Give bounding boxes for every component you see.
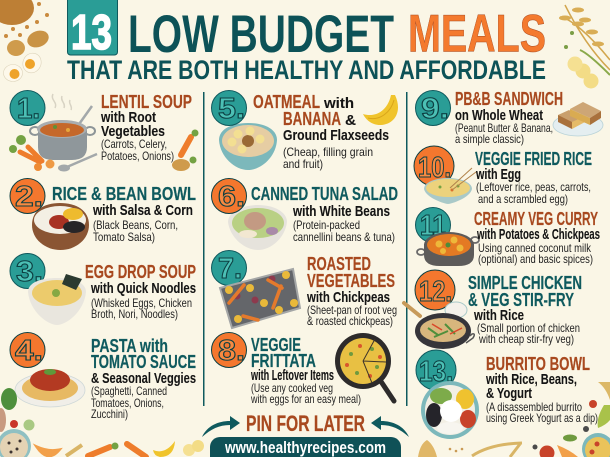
- text: oatmeal: (Cheap, filling grain: [283, 145, 373, 159]
- text: veggie frittata: [250, 335, 361, 406]
- icon: curry pot: [417, 232, 479, 266]
- text: canned tuna salad: with White Beans: [292, 203, 390, 220]
- text: creamy veg curry: [474, 209, 600, 266]
- meal 4: pasta with tomato sauce: [10, 332, 196, 421]
- text: oatmeal: with: [323, 95, 354, 112]
- number 2: 2.: [15, 181, 43, 213]
- text: veggie frittata: FRITTATA: [251, 351, 316, 371]
- title: [67, 0, 546, 85]
- text: lentil soup: LENTIL SOUP: [101, 92, 192, 112]
- number 8: [212, 332, 246, 368]
- number 9: [416, 90, 450, 126]
- text: roasted vegetables: & roasted chickpeas): [307, 314, 393, 328]
- text: egg drop soup: [85, 262, 196, 321]
- text: pb and b sandwich: on Whole Wheat: [455, 107, 543, 124]
- icon: wok: [404, 302, 474, 349]
- icon: banana: [363, 95, 398, 125]
- icon: spaghetti plate: [15, 369, 85, 407]
- text: lentil soup: Potatoes, Onions): [101, 149, 174, 163]
- icon: rice bowl: [32, 203, 89, 250]
- text: lentil soup: (Carrots, Celery,: [101, 137, 167, 151]
- icon: fried rice bowl: [424, 168, 476, 204]
- pin for later: PIN FOR LATER: [246, 411, 365, 436]
- text: rice and bean bowl: Tomato Salsa): [93, 230, 155, 244]
- number 7: 7.: [218, 253, 242, 285]
- meal 8: veggie frittata: [212, 332, 394, 406]
- text: chicken stir fry: [468, 273, 582, 346]
- text: pasta with tomato sauce: & Seasonal Veggies: [91, 370, 196, 387]
- meal 9: pb and b sandwich: [416, 89, 603, 146]
- icon: sandwich: [553, 102, 603, 136]
- decoration: bottom right food: [418, 382, 610, 457]
- text: rice and bean bowl: RICE & BEAN BOWL: [52, 184, 196, 204]
- text: rice and bean bowl: with Salsa & Corn: [92, 202, 193, 219]
- meal 10: veggie fried rice: [414, 146, 592, 206]
- heading: low budget: LOW BUDGET: [128, 5, 394, 64]
- text: lentil soup: with Root: [100, 109, 156, 126]
- text: canned tuna salad: [251, 184, 398, 244]
- number 12: [415, 270, 455, 310]
- meal 1: lentil soup: [9, 90, 198, 172]
- text: chicken stir fry: & VEG STIR-FRY: [468, 290, 574, 310]
- text: egg drop soup: (Whisked Eggs, Chicken: [91, 296, 192, 310]
- meal 13: burrito bowl: [416, 350, 598, 439]
- text: pb and b sandwich: a simple classic): [455, 132, 524, 146]
- text: burrito bowl: with Rice, Beans,: [485, 371, 577, 388]
- meal 5: oatmeal with banana: [212, 90, 398, 171]
- number 2: [10, 178, 45, 214]
- icon: frittata skillet: [335, 333, 394, 401]
- number 4: 4.: [15, 335, 43, 367]
- text: pasta with tomato sauce: PASTA with: [91, 336, 168, 356]
- decoration: wheat and banana slices top right: [559, 5, 610, 88]
- text: rice and bean bowl: [52, 184, 196, 244]
- icon: sheet pan: [220, 269, 300, 328]
- text: pb and b sandwich: (Peanut Butter & Banana,: [455, 121, 553, 135]
- text: roasted vegetables: VEGETABLES: [307, 271, 395, 291]
- text: oatmeal: BANANA: [283, 109, 341, 129]
- icon: soup pot: [9, 94, 198, 172]
- text: veggie fried rice: with Egg: [475, 166, 521, 183]
- text: rice and bean bowl: (Black Beans, Corn,: [93, 218, 178, 232]
- text: pasta with tomato sauce: Tomatoes, Onions,: [91, 396, 164, 410]
- number 5: [212, 90, 246, 126]
- icon: oatmeal bowl: [219, 123, 277, 170]
- text: veggie frittata: with Leftover Items: [250, 367, 334, 384]
- text: burrito bowl: (A disassembled burrito: [486, 400, 582, 414]
- text: veggie frittata: with eggs for an easy meal): [250, 392, 361, 406]
- text: veggie frittata: (Use any cooked veg: [251, 381, 333, 395]
- text: pb and b sandwich: PB&B SANDWICH: [455, 89, 563, 109]
- number 4: [10, 332, 45, 368]
- icon: burrito bowl: [421, 381, 479, 439]
- website pill: www.healthyrecipes.com: [224, 438, 386, 457]
- text: pasta with tomato sauce: (Spaghetti, Canned: [91, 384, 167, 398]
- text: pasta with tomato sauce: Zucchini): [91, 407, 128, 421]
- text: oatmeal: Ground Flaxseeds: [283, 127, 389, 144]
- text: chicken stir fry: with cheap stir-fry veg): [478, 332, 574, 346]
- decoration: lentils, potatoes and eggs top left: [0, 0, 51, 82]
- number 13: [416, 350, 456, 390]
- text: roasted vegetables: (Sheet-pan of root veg: [307, 303, 397, 317]
- number 1: [10, 90, 45, 126]
- text: burrito bowl: [485, 354, 598, 425]
- text: veggie frittata: VEGGIE: [251, 335, 301, 355]
- text: oatmeal: &: [345, 112, 356, 129]
- meal 7: roasted vegetables: [212, 250, 397, 328]
- meal 11: creamy veg curry: [416, 208, 600, 266]
- meal 6: canned tuna salad: [212, 178, 398, 250]
- number 10: 10.: [418, 152, 451, 184]
- number 6: [212, 178, 246, 214]
- text: canned tuna salad: cannellini beans & tuna): [293, 230, 395, 244]
- number 12: 12.: [419, 276, 452, 308]
- text: roasted vegetables: ROASTED: [307, 254, 371, 274]
- meal 12: chicken and veg stir fry: [404, 270, 582, 349]
- text: burrito bowl: & Yogurt: [486, 385, 532, 402]
- text: egg drop soup: Broth, Nori, Noodles): [91, 307, 178, 321]
- meal 2: rice and bean bowl: [10, 178, 196, 250]
- icon: tuna salad bowl: [228, 205, 287, 250]
- text: chicken stir fry: (Small portion of chicken: [477, 321, 580, 335]
- number badge 13: 13: [71, 6, 112, 60]
- text: lentil soup: [100, 92, 192, 163]
- number 10: [414, 146, 454, 186]
- text: egg drop soup: EGG DROP SOUP: [85, 262, 196, 282]
- arrow left: [202, 416, 240, 437]
- text: chicken stir fry: with Rice: [473, 307, 524, 324]
- text: canned tuna salad: (Protein-packed: [293, 218, 360, 232]
- text: lentil soup: Vegetables: [101, 123, 165, 140]
- text: pasta with tomato sauce: [91, 336, 196, 421]
- number 3: [10, 254, 45, 288]
- text: oatmeal: and fruit): [283, 157, 323, 171]
- number 6: 6.: [218, 181, 245, 213]
- text: roasted vegetables: [306, 254, 397, 328]
- number 9: 9.: [421, 93, 449, 125]
- number 5: 5.: [218, 93, 245, 125]
- text: oatmeal: OATMEAL: [253, 92, 320, 112]
- text: egg drop soup: with Quick Noodles: [90, 280, 196, 297]
- icon: soup bowl: [28, 274, 86, 325]
- number 8: 8.: [218, 335, 245, 367]
- text: veggie fried rice: and a scrambled egg): [478, 192, 568, 206]
- number 3: 3.: [16, 256, 43, 288]
- text: roasted vegetables: with Chickpeas: [306, 289, 390, 306]
- heading: meals: MEALS: [408, 4, 546, 64]
- meal 3: egg drop soup: [10, 254, 196, 325]
- number 11: 11: [420, 210, 446, 242]
- text: canned tuna salad: CANNED TUNA SALAD: [251, 184, 398, 204]
- number 1: 1.: [17, 93, 40, 125]
- number 7: [212, 250, 246, 286]
- decoration: bottom left food: [0, 388, 204, 457]
- arrow right: [371, 416, 409, 437]
- text: pb and b sandwich: [455, 89, 563, 146]
- text: pasta with tomato sauce: TOMATO SAUCE: [91, 352, 196, 372]
- text: oatmeal: [253, 92, 389, 171]
- number 13: 13.: [419, 356, 453, 388]
- text: veggie fried rice: [475, 149, 592, 206]
